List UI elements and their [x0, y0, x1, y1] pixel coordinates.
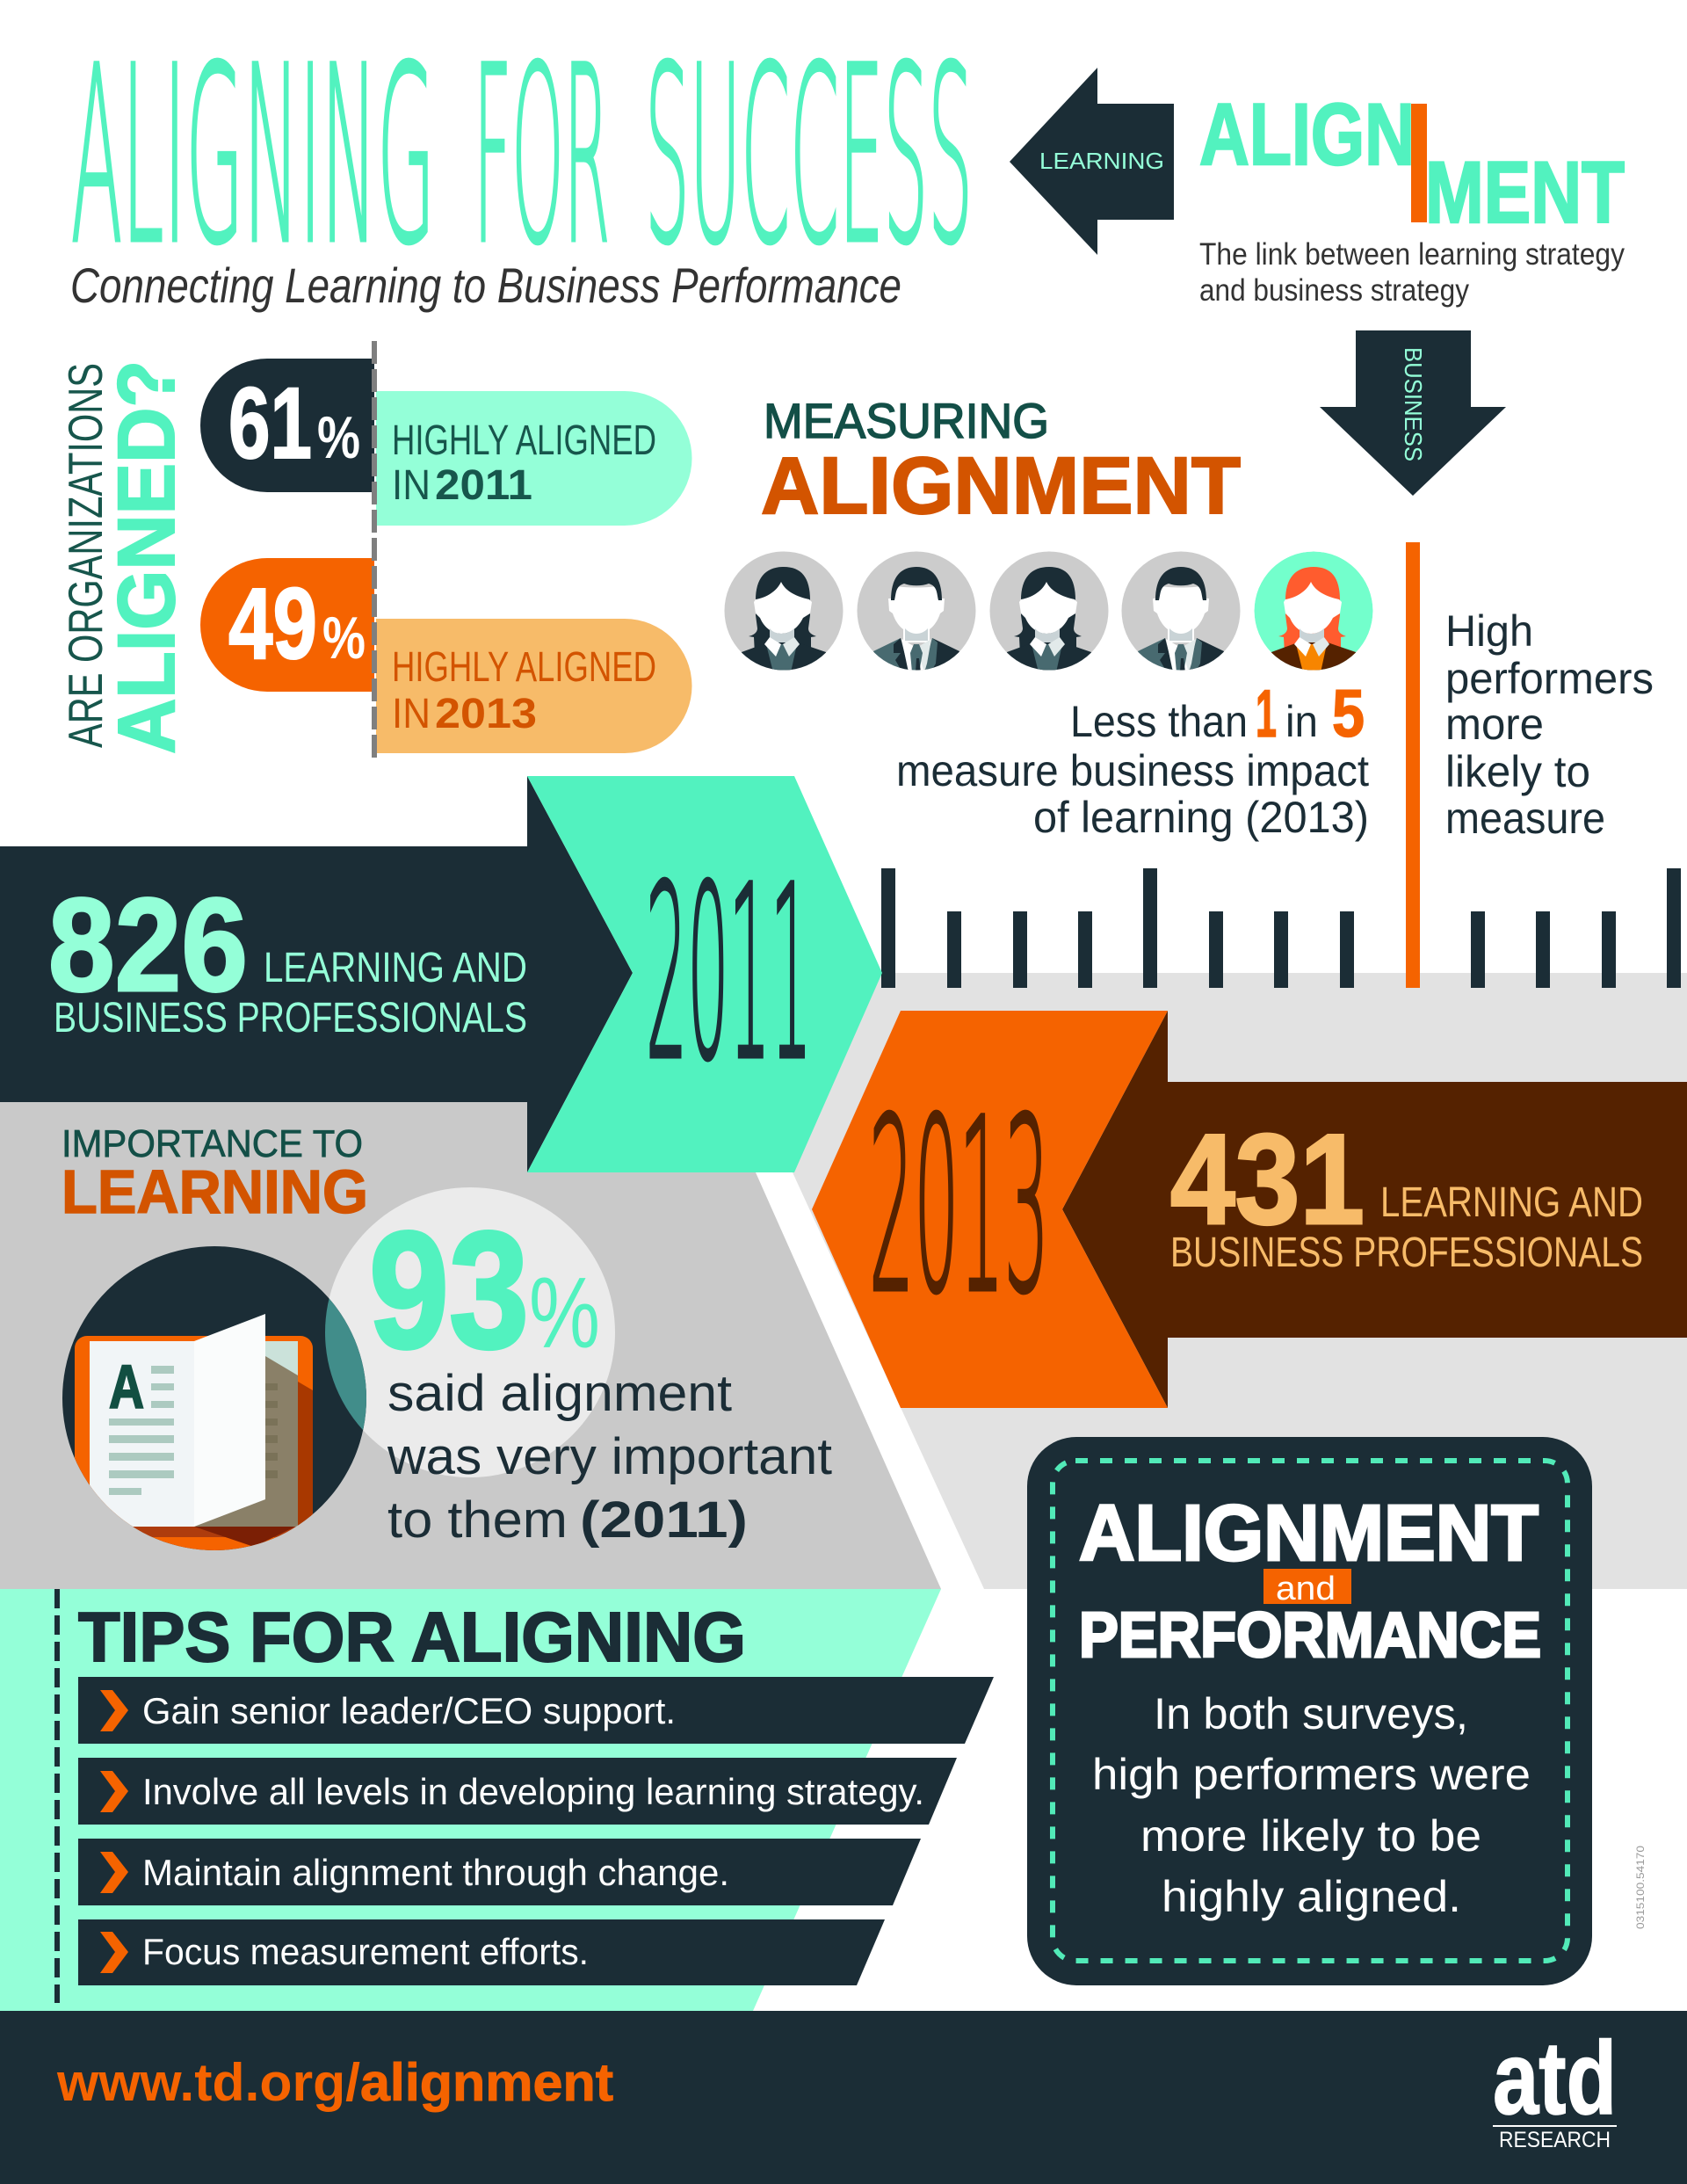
stat: less than 1 in 5: of learning (2013)	[1033, 793, 1369, 842]
stat: 93 percent: (2011)	[580, 1491, 748, 1549]
stat: 61 percent 2011: 61	[228, 367, 312, 480]
mint tips background	[0, 1589, 941, 2011]
callout: alignment and performance: PERFORMANCE	[1079, 1600, 1541, 1671]
heading: are organizations aligned: ALIGNED?	[102, 360, 192, 754]
banner: 2011: BUSINESS PROFESSIONALS	[54, 995, 527, 1041]
stat: 49 percent 2013: HIGHLY ALIGNED	[392, 644, 656, 691]
banner: 2013	[812, 1011, 1687, 1408]
banner: 2011	[0, 776, 882, 1172]
stat: 61 percent 2011	[200, 359, 692, 526]
heading: are organizations aligned: ARE ORGANIZATIONS	[58, 363, 112, 748]
stat: less than 1 in 5	[896, 677, 1369, 842]
stat: 49 percent 2013: IN	[392, 691, 431, 737]
print code: 0315100.54170	[1634, 1846, 1647, 1929]
footer	[0, 2011, 1687, 2184]
stat: 61 percent 2011: HIGHLY ALIGNED	[392, 417, 656, 464]
footer: alignment	[360, 2053, 613, 2112]
alignment wordmark: ALIGN	[1199, 85, 1415, 183]
stat: 49 percent 2013: %	[322, 605, 366, 671]
stat: less than 1 in 5: Less than	[1070, 697, 1248, 746]
banner: 2013: 431	[1170, 1107, 1365, 1251]
arrow: business	[1320, 330, 1506, 496]
footer: www.td.org/	[56, 2053, 360, 2112]
logo: atd research: atd	[1493, 2021, 1617, 2137]
high performers divider	[1406, 542, 1420, 988]
stat: 93 percent	[369, 1198, 832, 1549]
alignment definition: and business strategy	[1199, 273, 1469, 308]
callout: alignment and performance: more likely to be	[1140, 1811, 1481, 1861]
tip 2: Involve all levels in developing learning strategy.	[142, 1771, 924, 1812]
tip 1	[78, 1677, 994, 1744]
avatar: woman 1	[724, 552, 844, 672]
stat: 49 percent 2013: 49	[228, 568, 317, 680]
stat: 93 percent: to them	[387, 1491, 568, 1549]
banner: 2013: 2013	[869, 1069, 1049, 1346]
stat: 93 percent: %	[529, 1258, 600, 1369]
heading: importance to learning: LEARNING	[62, 1157, 368, 1226]
icon: open book: A	[109, 1353, 144, 1421]
stat: 93 percent: said alignment	[387, 1365, 732, 1422]
high performers text: more	[1445, 700, 1544, 749]
stat: 61 percent 2011: 2011	[435, 462, 532, 509]
subtitle: Connecting Learning to Business Performance	[70, 258, 901, 313]
light grey band	[793, 973, 1687, 1589]
alignment wordmark: MENT	[1425, 143, 1625, 241]
heading: measuring alignment: MEASURING	[764, 393, 1049, 448]
avatar: woman 2	[989, 552, 1109, 672]
heading: importance to learning: IMPORTANCE TO	[62, 1122, 363, 1165]
callout: alignment and performance: highly aligned.	[1162, 1872, 1461, 1921]
tip 3	[78, 1839, 921, 1905]
callout: alignment and performance	[1027, 1437, 1592, 1985]
timeline ticks	[881, 868, 1681, 988]
high performers text: High	[1445, 606, 1533, 656]
arrow: business: BUSINESS	[1400, 347, 1427, 461]
callout: alignment and performance: and	[1276, 1571, 1336, 1607]
alignment definition	[1199, 237, 1625, 308]
avatar: man 2	[1121, 552, 1241, 672]
callout: alignment and performance: In both surveys,	[1154, 1689, 1468, 1738]
stat: less than 1 in 5: 5	[1332, 677, 1365, 751]
infographic canvas: 2011	[646, 836, 812, 1114]
dark grey panel background	[0, 1102, 941, 1589]
icon: open book	[62, 1246, 366, 1564]
callout: alignment and performance: high performers were	[1092, 1750, 1531, 1799]
high performers text: likely to	[1445, 747, 1590, 796]
heading: measuring alignment	[761, 393, 1241, 531]
tip 2	[78, 1758, 957, 1825]
callout: alignment and performance: ALIGNMENT	[1079, 1490, 1539, 1578]
avatar: highlighted woman	[1255, 552, 1372, 672]
heading: importance to learning	[62, 1122, 368, 1226]
banner: 2013: LEARNING AND	[1380, 1179, 1643, 1226]
arrow: learning	[1010, 68, 1174, 255]
tip 1: Gain senior leader/CEO support.	[142, 1690, 676, 1731]
tip 3: Maintain alignment through change.	[142, 1852, 729, 1893]
heading: are organizations aligned	[58, 360, 192, 754]
banner: 2011: LEARNING AND	[264, 945, 527, 991]
circle overlap	[325, 1299, 366, 1431]
stat: 49 percent 2013: 2013	[435, 691, 537, 737]
stat: less than 1 in 5: 1	[1256, 677, 1277, 751]
title: ALIGNING	[71, 16, 435, 298]
alignment wordmark	[1199, 85, 1625, 241]
logo: atd research: RESEARCH	[1499, 2128, 1611, 2152]
stat: 93 percent: was very important	[387, 1428, 832, 1485]
heading: measuring alignment: ALIGNMENT	[761, 441, 1241, 531]
title: FOR	[474, 16, 610, 298]
high performers text: performers	[1445, 654, 1654, 703]
pale circle behind statistic	[325, 1187, 615, 1477]
banner: 2011: 826	[48, 870, 248, 1019]
stat: 93 percent: 93	[369, 1198, 529, 1383]
arrow: learning: LEARNING	[1039, 148, 1164, 174]
heading: tips for aligning: TIPS FOR ALIGNING	[78, 1598, 746, 1676]
stat: less than 1 in 5: in	[1285, 697, 1318, 746]
stat: 49 percent 2013	[200, 558, 692, 753]
alignment definition: The link between learning strategy	[1199, 237, 1625, 272]
avatar: man 1	[858, 552, 975, 672]
stat: 61 percent 2011: %	[317, 404, 360, 471]
tip 4	[78, 1919, 885, 1985]
high performers text: measure	[1445, 794, 1605, 843]
tip 4: Focus measurement efforts.	[142, 1931, 589, 1972]
high performers text	[1445, 606, 1654, 843]
stat: less than 1 in 5: measure business impact	[896, 746, 1369, 795]
stat: 61 percent 2011: IN	[392, 462, 431, 509]
